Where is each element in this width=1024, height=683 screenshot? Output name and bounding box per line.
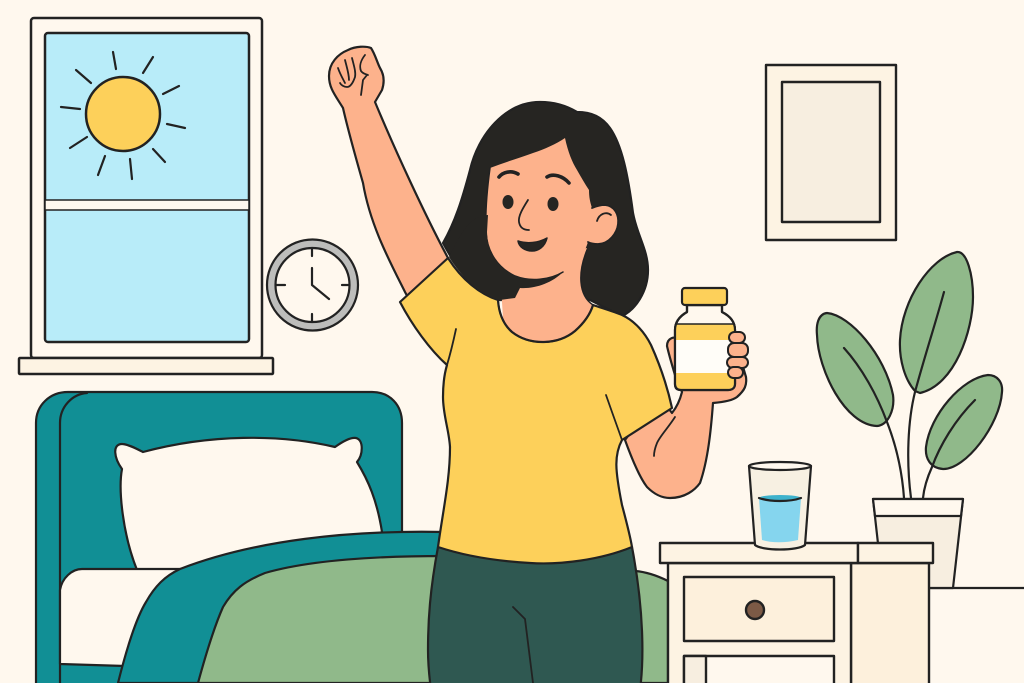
lower shelf: [684, 656, 834, 683]
clock face: [276, 248, 350, 322]
eyebrows: [499, 172, 569, 183]
right eye: [548, 197, 558, 211]
nightstand side: [851, 563, 929, 683]
right leaf: [926, 375, 1002, 469]
large upper leaf: [900, 252, 973, 393]
jaw line: [486, 168, 563, 279]
hair back: [443, 102, 648, 316]
sun: [86, 77, 160, 151]
headboard front edge: [60, 393, 87, 683]
smile: [518, 238, 547, 251]
neck line: [498, 300, 593, 342]
window with sun: [19, 18, 273, 374]
headboard back: [36, 392, 402, 683]
bottle yellow band upper: [676, 324, 734, 340]
finger 2: [728, 343, 748, 357]
potted plant: [817, 252, 1024, 588]
nightstand top side: [858, 543, 933, 563]
water: [759, 498, 801, 542]
green bedspread: [198, 556, 445, 683]
nightstand: [660, 543, 933, 683]
stems and leaf veins: [844, 292, 975, 498]
hair front shadow under chin: [449, 215, 563, 300]
bottle yellow band lower: [676, 373, 734, 389]
nightstand front: [668, 563, 851, 683]
mattress: [60, 569, 200, 666]
glass body: [749, 466, 811, 550]
neck: [500, 248, 593, 350]
eyes: [502, 195, 514, 209]
vitamin bottle: [675, 288, 735, 390]
window sash bar: [45, 200, 249, 210]
clock rim: [267, 240, 358, 330]
outer frame: [766, 65, 896, 240]
neck right edge: [581, 250, 593, 305]
sleeve crease left: [447, 329, 456, 365]
bottle body: [675, 305, 735, 390]
bottle label: [676, 340, 734, 373]
bed: [36, 392, 668, 683]
bottle cap: [682, 288, 727, 305]
bottle shoulder line: [676, 323, 734, 325]
sleeve crease right: [606, 395, 622, 440]
teal blanket: [118, 532, 445, 683]
ear: [588, 205, 618, 244]
bottle outline: [675, 305, 735, 390]
picture frame: [766, 65, 896, 240]
plant pot: [873, 499, 963, 588]
pillow: [115, 438, 382, 575]
left leaf: [817, 313, 893, 426]
yellow t-shirt: [400, 258, 672, 563]
sun rays: [61, 52, 185, 179]
water surface: [759, 495, 801, 501]
water line: [759, 498, 801, 501]
fingers: [727, 332, 748, 378]
drawer knob: [746, 601, 764, 619]
window sill: [19, 358, 273, 374]
nose: [519, 200, 529, 230]
window glass: [45, 33, 249, 342]
finger 1: [729, 332, 745, 343]
window frame: [31, 18, 262, 358]
pot rim: [873, 499, 963, 516]
floor and ledge line: [925, 587, 1024, 589]
nightstand top: [660, 543, 858, 563]
lower shelf side panel: [684, 656, 706, 683]
inner mat: [782, 82, 880, 222]
finger 3: [727, 357, 748, 368]
glass of water: [749, 462, 811, 550]
glass rim: [749, 462, 811, 470]
woman: [329, 47, 748, 683]
drawer: [684, 577, 834, 641]
elbow crease: [654, 417, 675, 456]
pants: [428, 547, 642, 683]
face: [486, 138, 618, 279]
raised arm and fist: [329, 47, 455, 320]
forearm and hand: [625, 338, 746, 498]
wall clock: [267, 240, 358, 330]
bedspread right side: [635, 571, 668, 683]
clock ticks and hands: [276, 248, 349, 322]
pants crease: [513, 607, 533, 683]
finger 4: [728, 367, 743, 378]
ear inner detail: [597, 213, 611, 221]
fist finger lines: [338, 55, 368, 95]
